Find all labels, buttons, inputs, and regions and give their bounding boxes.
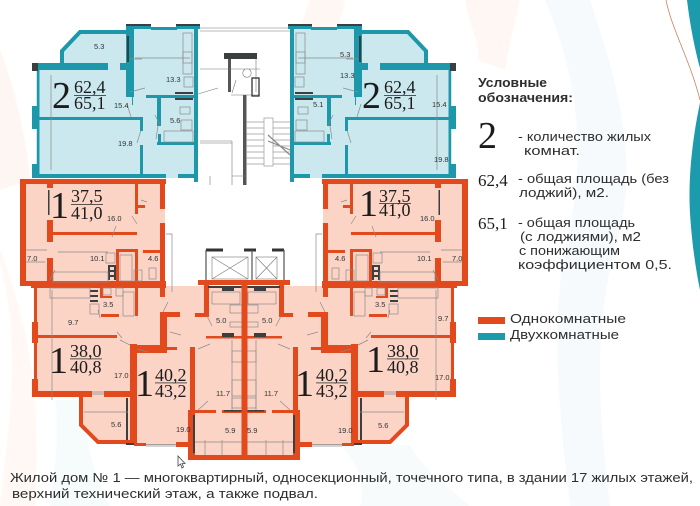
- icon: mouse cursor: [178, 456, 185, 468]
- legend: area with loggias: с понижающим: [519, 243, 620, 258]
- pink floor area: [36, 286, 452, 459]
- caption: верхний технический этаж, а также подвал.: [12, 486, 318, 501]
- legend: rooms: 2: [478, 115, 497, 157]
- legend: area without loggias: [478, 171, 669, 200]
- area labels: left and right apartments: 16.0: [420, 214, 435, 223]
- area labels: left and right apartments: 5.6: [378, 421, 388, 430]
- legend: area with loggias: [478, 214, 672, 272]
- area labels: left and right apartments: 10.1: [417, 254, 432, 263]
- area labels: left and right apartments: 5.6: [111, 420, 121, 429]
- apartment label: 1 room bottom right: [295, 363, 348, 405]
- legend: two-room swatch: [478, 327, 619, 342]
- apartment label: 1 room upper right: 41,0: [379, 200, 410, 220]
- panel: one-room apartment bottom left: [134, 280, 246, 460]
- legend: rooms: комнат.: [524, 143, 580, 158]
- caption: [10, 470, 693, 501]
- area labels: left and right apartments: 5.6: [170, 116, 180, 125]
- floor plan: [20, 24, 468, 460]
- area labels: left and right apartments: 19.0: [338, 426, 353, 435]
- area labels: left and right apartments: 5.3: [340, 50, 350, 59]
- apartment label: 1 room upper left: 1: [50, 185, 69, 227]
- thin orange curve: [666, 0, 700, 100]
- area labels: left and right apartments: 5.0: [262, 316, 272, 325]
- area labels: left and right apartments: 15.4: [432, 100, 447, 109]
- top wall right half: [244, 280, 290, 285]
- apartment label: 1 room bottom right: 40,2: [316, 365, 348, 385]
- apartment label: 1 room upper left: 41,0: [71, 203, 102, 223]
- apartment label: 1 room bottom left: 43,2: [155, 381, 186, 401]
- apartment label: 1 room lower left: 1: [49, 340, 68, 382]
- area labels: left and right apartments: 5.9: [247, 426, 257, 435]
- apartment label: 2 rooms right: [362, 75, 416, 117]
- area labels: left and right apartments: 13.3: [340, 71, 355, 80]
- building core: lift lobby, stairs: [198, 28, 290, 282]
- right edge teal ribbon: [687, 0, 700, 290]
- area labels: left and right apartments: 19.8: [434, 155, 449, 164]
- area labels: left and right apartments: 7.0: [27, 254, 37, 263]
- legend: rooms: [478, 115, 652, 158]
- area labels: left and right apartments: 19.0: [176, 425, 191, 434]
- apartment label: 1 room bottom left: [135, 363, 187, 405]
- area labels: left and right apartments: 16.0: [107, 214, 122, 223]
- area labels: left and right apartments: 17.0: [114, 371, 129, 380]
- legend: [478, 75, 672, 342]
- legend: area with loggias: 65,1: [478, 214, 508, 233]
- apartment label: 1 room bottom left: 1: [135, 363, 154, 405]
- legend: rooms: - количество жилых: [518, 129, 652, 144]
- legend heading: обозначения:: [478, 90, 573, 105]
- apartment label: 1 room lower left: 40,8: [70, 357, 102, 377]
- caption: Жилой дом № 1 — многоквартирный, односекционный, точечного типа, в здании 17 жилых этажей,: [10, 470, 693, 485]
- apartment label: 1 room bottom right: 1: [295, 363, 314, 405]
- apartment label: 2 rooms left: 62,4: [74, 77, 106, 97]
- area labels: left and right apartments: [27, 42, 462, 435]
- area labels: left and right apartments: 11.7: [216, 389, 230, 398]
- apartment label: 1 room lower right: [366, 339, 419, 381]
- apartment label: 1 room upper right: 1: [359, 183, 378, 225]
- apartment label: 2 rooms right: 65,1: [384, 93, 416, 113]
- apartment label: 1 room upper left: [50, 185, 103, 227]
- panel: one-room apartment bottom right: [242, 280, 354, 460]
- apartment label: 1 room bottom right: 43,2: [316, 381, 348, 401]
- area labels: left and right apartments: 5.9: [225, 426, 235, 435]
- apartment label: 1 room lower right: 1: [366, 339, 385, 381]
- area labels: left and right apartments: 10.1: [90, 254, 105, 263]
- legend: two-room swatch: Двухкомнатные: [510, 327, 619, 342]
- legend: area with loggias: - общая площадь: [518, 215, 635, 230]
- legend: area with loggias: коэффициентом 0,5.: [518, 257, 672, 272]
- area labels: left and right apartments: 19.8: [118, 139, 133, 148]
- area labels: left and right apartments: 11.7: [264, 389, 278, 398]
- legend: one-room swatch: Однокомнатные: [510, 311, 626, 326]
- central party wall: [242, 280, 248, 460]
- panel: one-room apartment lower left: [32, 284, 181, 445]
- panel: one-room apartment upper right: [316, 179, 468, 292]
- legend: area without loggias: - общая площадь (без: [518, 171, 669, 186]
- apartment label: 1 room upper right: [359, 183, 411, 225]
- apartment label: 2 rooms left: [52, 75, 106, 117]
- apartment label: 1 room upper right: 37,5: [379, 186, 410, 206]
- apartment label: 2 rooms left: 2: [52, 75, 71, 117]
- panel: two-room apartment left: [32, 24, 200, 182]
- area labels: left and right apartments: 13.3: [166, 75, 181, 84]
- area labels: left and right apartments: 4.6: [335, 254, 345, 263]
- apartment label: 2 rooms right: 62,4: [384, 77, 416, 97]
- area labels: left and right apartments: 5.0: [216, 316, 226, 325]
- legend: area without loggias: 62,4: [478, 171, 508, 190]
- legend heading: Условные: [478, 75, 547, 90]
- panel: one-room apartment upper left: [20, 179, 172, 292]
- apartment label: 1 room bottom left: 40,2: [155, 365, 186, 385]
- apartment label: 1 room upper left: 37,5: [71, 186, 102, 206]
- legend: one-room swatch: [478, 311, 626, 326]
- apartment label: 1 room lower right: 38,0: [387, 341, 418, 361]
- panel: two-room apartment right: [288, 24, 456, 182]
- panel: one-room apartment lower right: [307, 284, 456, 445]
- area labels: left and right apartments: 17.0: [435, 373, 450, 382]
- area labels: left and right apartments: 5.3: [94, 42, 104, 51]
- legend: area without loggias: лоджий), м2.: [519, 185, 609, 200]
- apartment label: 1 room lower right: 40,8: [387, 357, 418, 377]
- area labels: left and right apartments: 7.0: [452, 254, 462, 263]
- area labels: left and right apartments: 4.6: [148, 254, 158, 263]
- apartment label: 1 room lower left: [49, 340, 102, 382]
- area labels: left and right apartments: 9.7: [68, 318, 78, 327]
- apartment label: 2 rooms right: 2: [362, 75, 381, 117]
- area labels: left and right apartments: 5.1: [313, 100, 323, 109]
- area labels: left and right apartments: 3.5: [103, 300, 113, 309]
- apartment label: 1 room lower left: 38,0: [70, 341, 102, 361]
- apartment label: 2 rooms left: 65,1: [74, 93, 106, 113]
- legend: area with loggias: (с лоджиями), м2: [520, 229, 641, 244]
- area labels: left and right apartments: 15.4: [114, 101, 129, 110]
- area labels: left and right apartments: 3.5: [375, 300, 385, 309]
- area labels: left and right apartments: 9.7: [438, 314, 448, 323]
